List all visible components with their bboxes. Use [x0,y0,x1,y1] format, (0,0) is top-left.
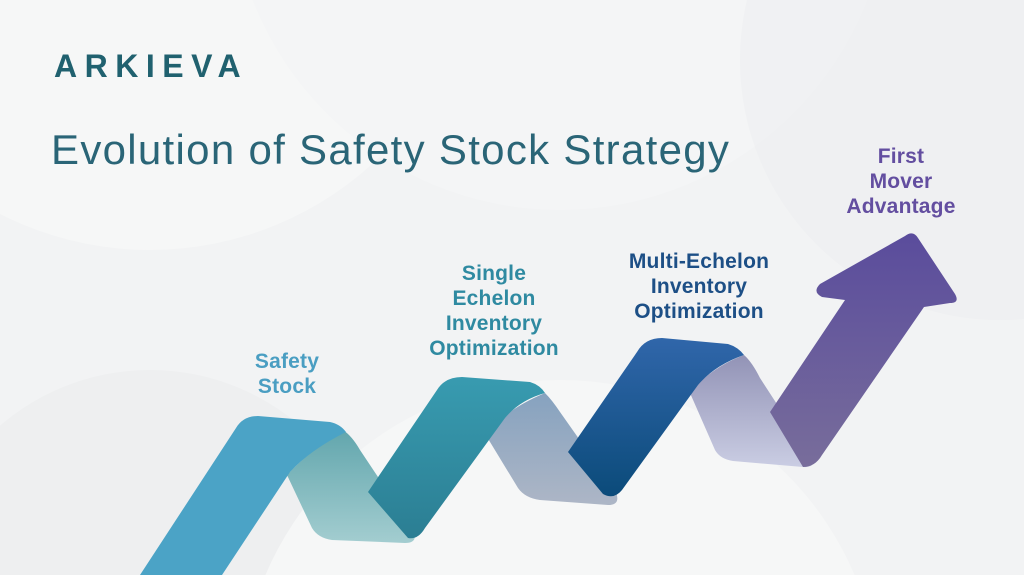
label: Multi-Echelon: Multi-Echelon [629,250,769,273]
label: First Mover Advantage: Mover [870,170,932,193]
arrow head [770,233,957,467]
label: First Mover Advantage: Advantage [846,195,956,218]
label: Safety Stock: Safety [255,350,319,373]
front strips [140,338,744,575]
label: Safety Stock: Stock [258,375,316,398]
label: Multi-Echelon: Optimization [634,300,764,323]
label: Single Echelon: Single [462,262,526,285]
label: Single Echelon: Optimization [429,337,559,360]
back strips [287,355,813,543]
title: Evolution of Safety Stock Strategy [51,126,730,173]
label: Multi-Echelon [629,250,769,323]
logo: ARKIEVA: ARKIEVA [54,48,248,84]
label: Single Echelon [429,262,559,360]
label: Single Echelon: Inventory [446,312,542,335]
label: First Mover Advantage: First [878,145,924,168]
label: Multi-Echelon: Inventory [651,275,747,298]
label: First Mover Advantage [846,145,956,218]
label: Safety Stock [255,350,319,398]
label: Single Echelon: Echelon [452,287,536,310]
